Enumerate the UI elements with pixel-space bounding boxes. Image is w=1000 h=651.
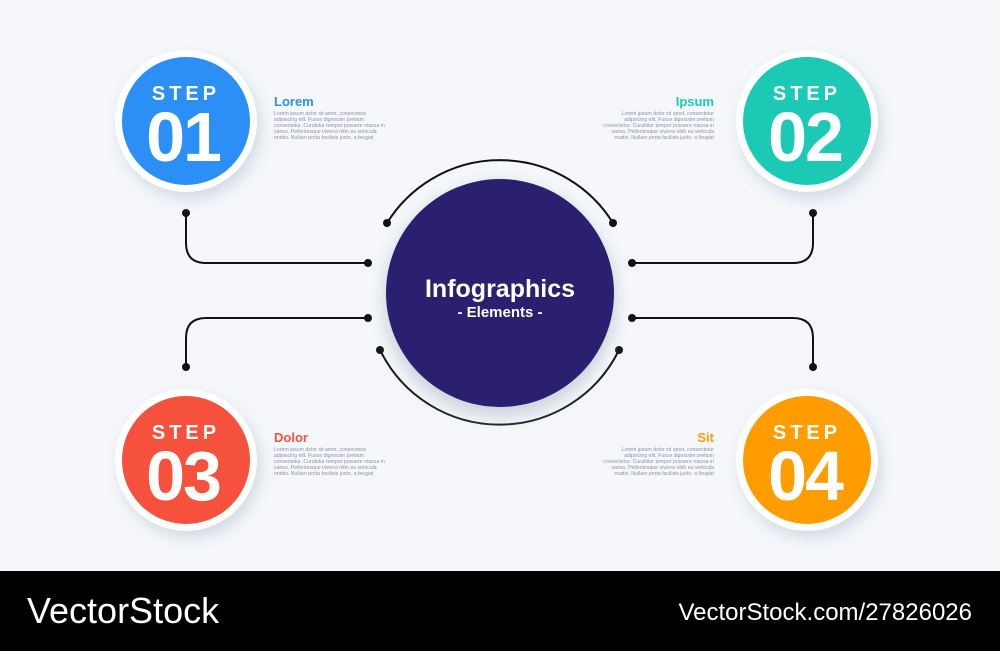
text: Sit: consectetur. Curabitur tempor posuere massa in (603, 459, 714, 465)
text: Sit: adipiscing elit. Fusce dignissim pretium (624, 453, 714, 459)
text: Lorem: Lorem (274, 94, 314, 109)
text: Ipsum: Lorem ipsum dolor sit amet, consectetur (622, 111, 714, 117)
watermark bar: VectorStock (27, 590, 220, 631)
step 03 (115, 389, 260, 537)
step 02 (736, 50, 881, 198)
text: Ipsum: Ipsum (676, 94, 714, 109)
watermark bar: VectorStock.com/27826026 (678, 599, 972, 626)
text: Sit: Sit (697, 430, 715, 445)
text: Lorem: adipiscing elit. Fusce dignissim pretium (274, 117, 364, 123)
step 04: STEP (773, 422, 841, 444)
text: Ipsum (603, 94, 715, 141)
text: Dolor: Lorem ipsum dolor sit amet, consectetur (274, 447, 367, 453)
step 04 (736, 389, 881, 537)
text: Ipsum: varius. Pellentesque viverra nibh eu vehicula (611, 129, 714, 135)
text: Dolor: consectetur. Curabitur tempor posuere massa in (274, 459, 385, 465)
text: Ipsum: adipiscing elit. Fusce dignissim pretium (624, 117, 714, 123)
text: Dolor: mattis. Nullam porta facilisis justo, a feugiat (274, 471, 374, 477)
text: Sit (603, 430, 715, 477)
text: Lorem: varius. Pellentesque viverra nibh eu vehicula (274, 129, 377, 135)
text: Lorem: mattis. Nullam porta facilisis justo, a feugiat (274, 135, 374, 141)
text: Dolor: varius. Pellentesque viverra nibh eu vehicula (274, 465, 377, 471)
step 03: STEP (152, 422, 220, 444)
step 01 (115, 50, 260, 198)
text: Lorem (274, 94, 385, 141)
step 03: 03 (146, 437, 220, 515)
text: Dolor (274, 430, 385, 477)
text: Sit: mattis. Nullam porta facilisis justo, a feugiat (615, 471, 715, 477)
text: Sit: varius. Pellentesque viverra nibh eu vehicula (611, 465, 714, 471)
step 01: STEP (152, 83, 220, 105)
text: Lorem: consectetur. Curabitur tempor posuere massa in (274, 123, 385, 129)
text: Lorem: Lorem ipsum dolor sit amet, consectetur (274, 111, 367, 117)
step 02: STEP (773, 83, 841, 105)
text: Ipsum: mattis. Nullam porta facilisis justo, a feugiat (615, 135, 715, 141)
center circle: - Elements - (457, 304, 543, 321)
text: Dolor: Dolor (274, 430, 308, 445)
step 01: 01 (146, 98, 220, 176)
center circle: Infographics (425, 275, 575, 303)
step 04: 04 (768, 437, 844, 515)
text: Ipsum: consectetur. Curabitur tempor posuere massa in (603, 123, 714, 129)
text: Dolor: adipiscing elit. Fusce dignissim pretium (274, 453, 364, 459)
step 02: 02 (768, 98, 842, 176)
connectors (186, 160, 813, 425)
watermark bar (0, 571, 1000, 651)
text: Sit: Lorem ipsum dolor sit amet, consectetur (622, 447, 714, 453)
center circle (384, 179, 616, 416)
